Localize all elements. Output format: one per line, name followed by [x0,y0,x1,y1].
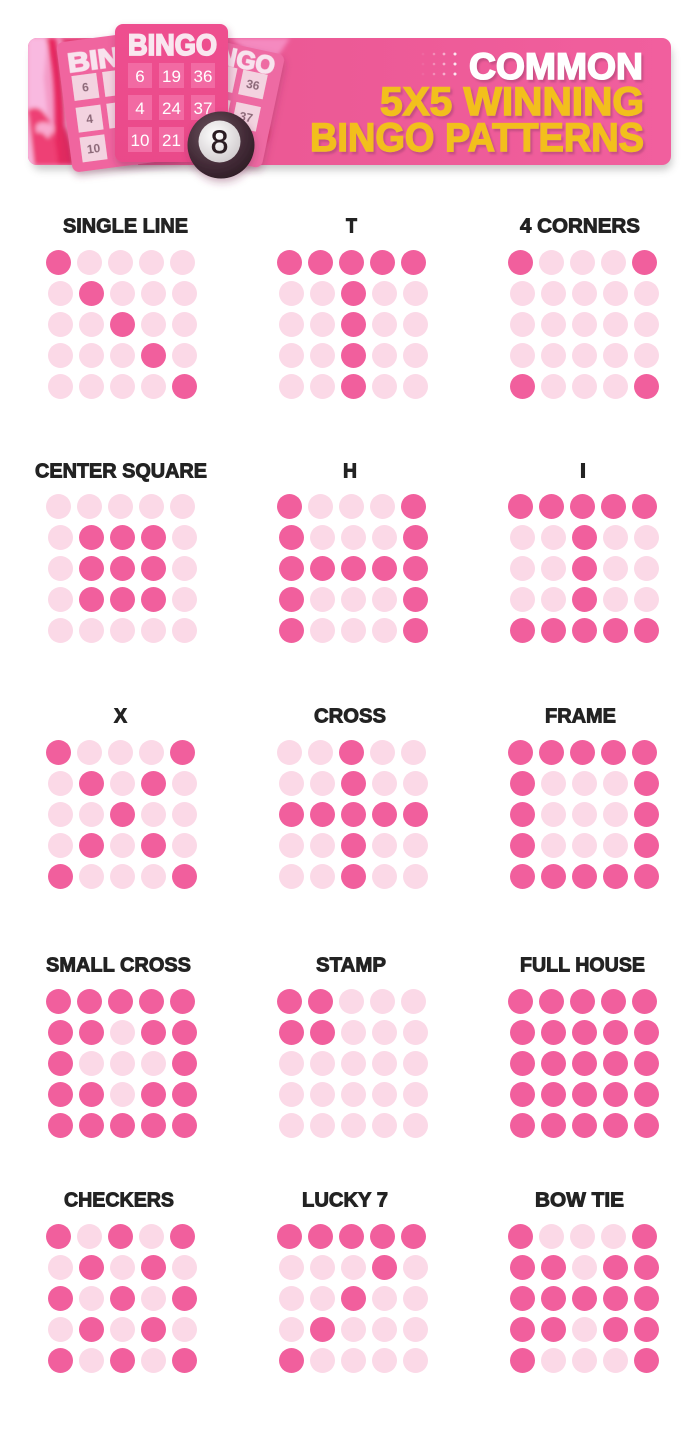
pattern grid: lucky 7 [278,1224,438,1378]
bingo card: left: 10 [86,141,101,157]
icon: eight ball [188,112,254,178]
heading: stamp: STAMP [316,954,386,976]
pattern grid: center square [46,494,197,643]
heading: small cross: SMALL CROSS [46,954,191,976]
bingo card: right: 37 [238,109,254,126]
banner background [28,38,671,165]
panel: center square [35,460,207,643]
pattern grid: T [277,250,428,399]
pattern grid: checkers [46,1224,197,1373]
heading: frame: FRAME [545,706,616,728]
panel: single line [46,216,197,399]
heading: 4 corners: 4 CORNERS [520,216,640,238]
panel: full house [508,954,659,1138]
bingo card: center: BINGO [128,29,217,62]
pattern grid: I [508,494,659,643]
pattern grid: full house [508,989,659,1138]
pattern grid: 4 corners [508,250,659,399]
heading: center square: CENTER SQUARE [35,460,207,482]
panel: bow tie [472,1184,700,1389]
bingo card: left: 6 [81,80,90,95]
bingo card: right [152,32,285,169]
photo background with ribbons [28,38,290,165]
pattern grid: small cross [46,989,197,1138]
pattern grid: stamp [277,989,428,1138]
title: common 5x5 winning bingo patterns: 5X5 WINNING [380,80,644,124]
bingo card: center: 21 [162,131,181,150]
heading: X: X [114,706,128,728]
bingo card: center: 6 [135,67,145,86]
bingo card: center: 4 [135,99,145,118]
pattern grid: cross [277,740,428,889]
panel: 4 corners [508,216,659,399]
bingo card: center: 24 [162,99,181,118]
bingo card: center: 19 [162,67,181,86]
title: common 5x5 winning bingo patterns: COMMON [469,46,643,87]
bingo card: left: BINGO [66,36,169,78]
panel: I [508,460,659,643]
bingo card: center [115,24,228,162]
title: common 5x5 winning bingo patterns: BINGO PATTERNS [310,116,644,160]
panel: small cross [46,954,197,1138]
bingo card: center: 37 [194,99,212,118]
heading: full house: FULL HOUSE [520,954,645,976]
pattern grid: bow tie [510,1224,670,1378]
panel: frame [508,706,659,889]
panel: T [277,216,428,399]
title: common 5x5 winning bingo patterns [310,46,644,160]
heading: single line: SINGLE LINE [63,216,188,238]
bingo card: center: 36 [194,67,212,86]
panel: X [46,706,197,889]
heading: I: I [580,460,586,482]
icon: eight ball: 8 [211,124,228,160]
panel: checkers [46,1190,197,1373]
banner shadow [32,46,672,170]
bingo card: right: 36 [245,77,261,93]
pattern grid: single line [46,250,197,399]
header banner [28,23,676,188]
bingo card: center: 10 [131,131,149,150]
pattern grid: H [277,494,428,643]
pattern grid: frame [508,740,659,889]
heading: H: H [343,460,357,482]
panel: cross [277,706,428,889]
panel: stamp [277,954,428,1138]
panel: H [277,460,428,643]
heading: lucky 7: LUCKY 7 [302,1190,388,1212]
panel: lucky 7 [277,1190,428,1373]
pattern grid: X [46,740,197,889]
bingo card: left: 4 [85,112,94,126]
heading: bow tie: BOW TIE [535,1190,624,1212]
bingo card: right: NGO [216,42,277,81]
heading: T: T [346,216,357,238]
decorative dots [422,52,456,76]
heading: cross: CROSS [314,706,386,728]
bingo card: left [56,28,184,173]
heading: checkers: CHECKERS [64,1190,174,1212]
